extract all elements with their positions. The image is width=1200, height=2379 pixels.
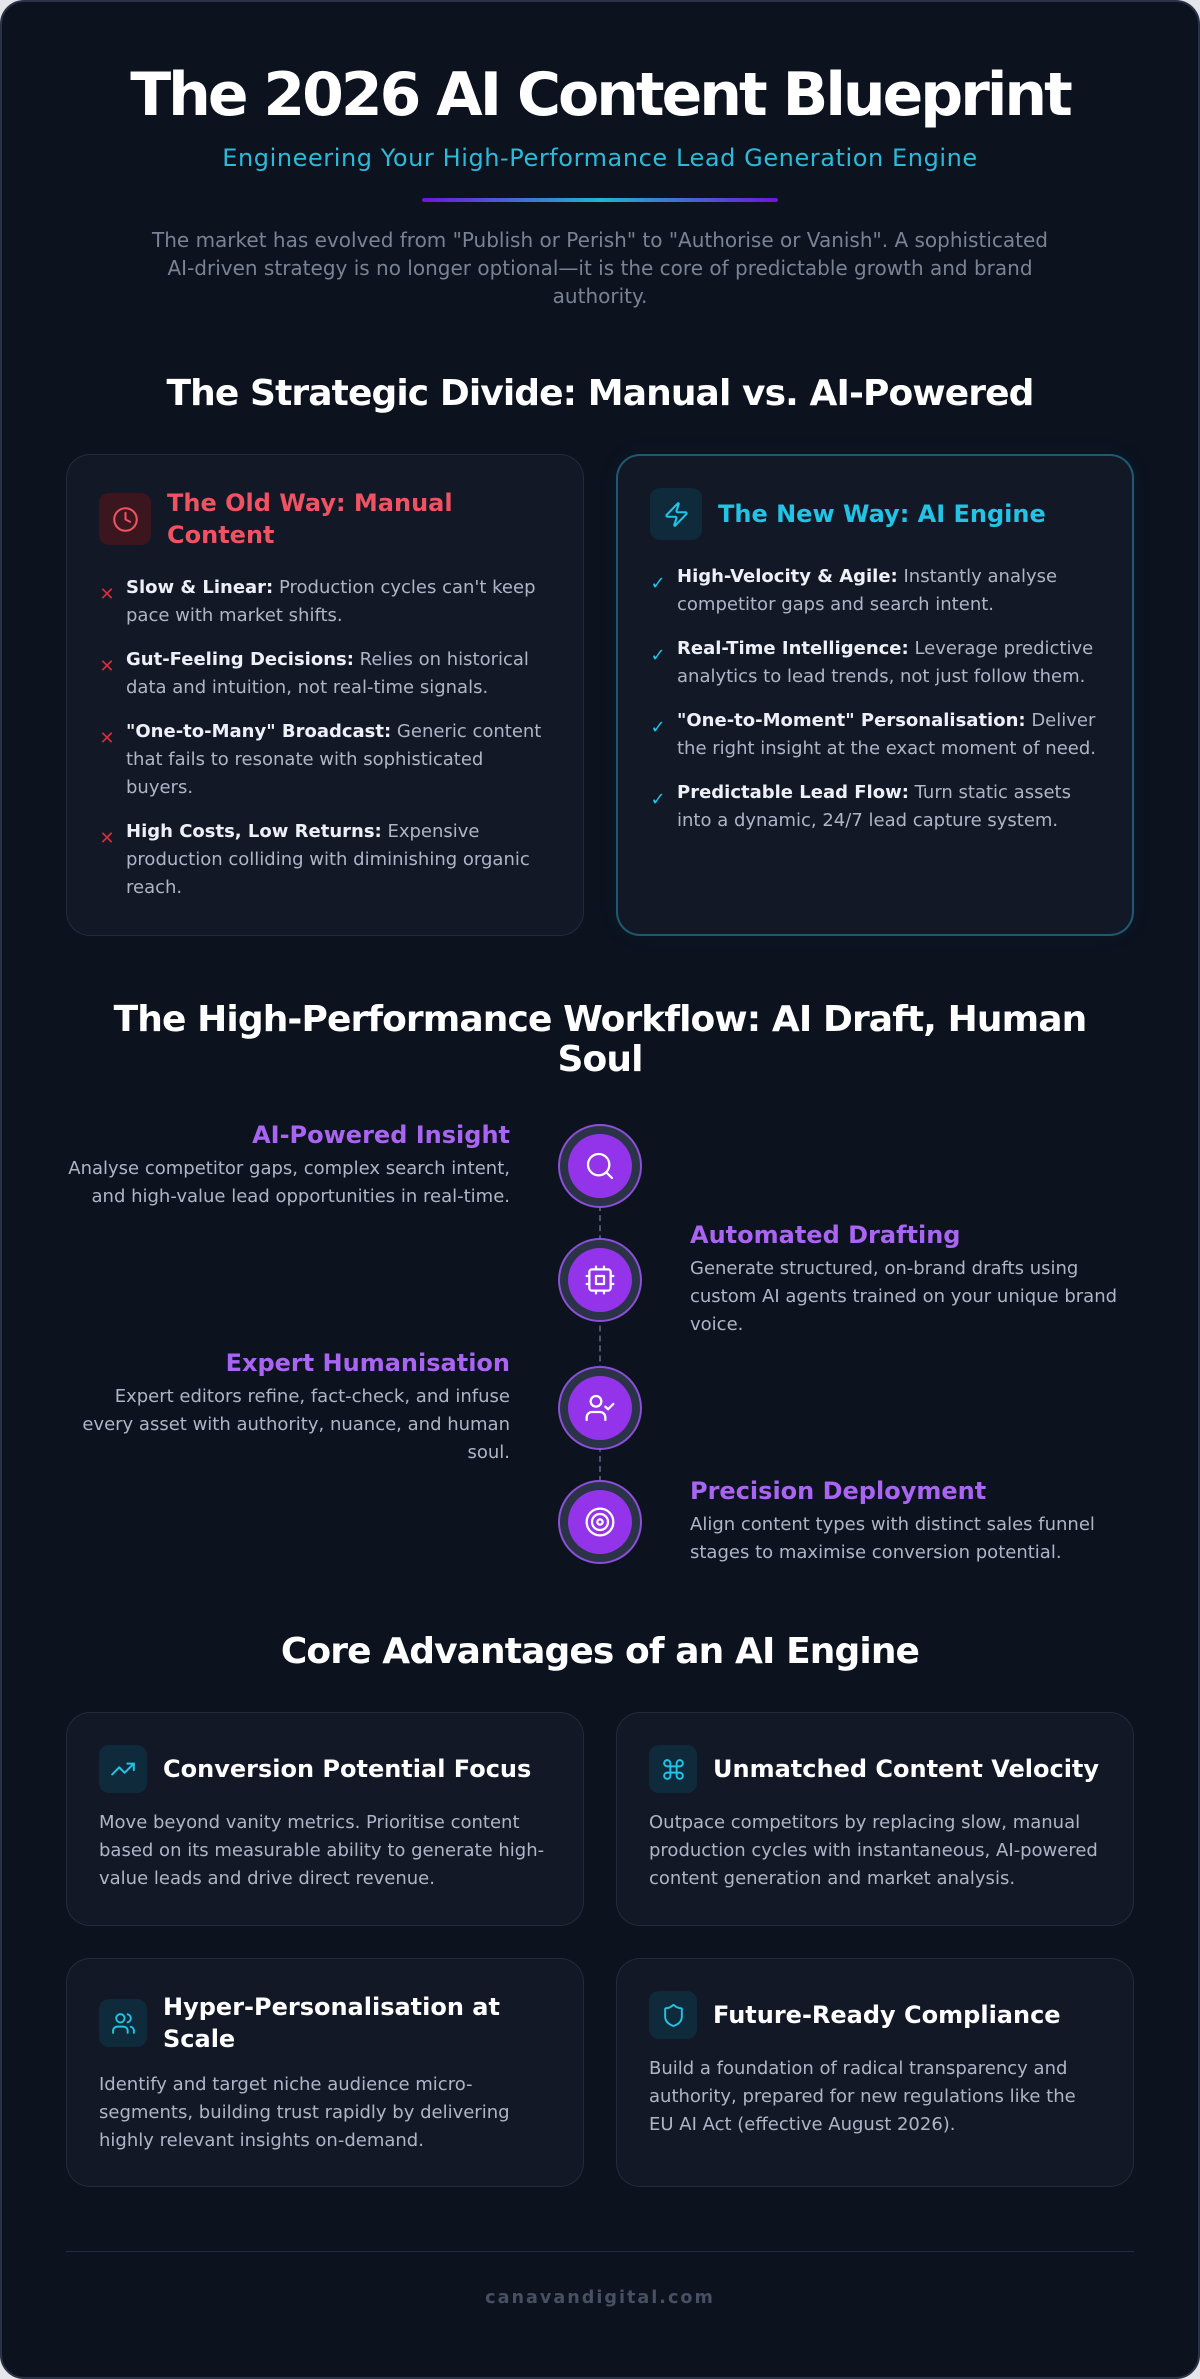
step text: AI-powered insight xyxy=(68,1121,510,1207)
card text: authority, prepared for new regulations like the xyxy=(649,2086,1076,2107)
card text: based on its measurable ability to generate high- xyxy=(99,1840,544,1861)
card text xyxy=(649,1812,1098,1889)
new way point 1: competitor gaps and search intent. xyxy=(677,594,994,615)
step text: precision deployment: Precision Deployment xyxy=(690,1477,986,1505)
marker: ✕ xyxy=(99,728,115,749)
card text xyxy=(99,2074,510,2151)
card heading: Unmatched Content Velocity xyxy=(713,1755,1099,1783)
panel: old way xyxy=(66,454,584,936)
intro text xyxy=(152,228,1048,308)
workflow timeline xyxy=(68,1121,1117,1564)
new way point 4 xyxy=(677,782,1071,831)
marker: ✓ xyxy=(650,789,666,810)
step text: automated drafting: Generate structured, on-brand drafts using xyxy=(690,1258,1078,1279)
old way point 4: production colliding with diminishing organic xyxy=(126,849,530,870)
card text: Identify and target niche audience micro- xyxy=(99,2074,473,2095)
card heading: Scale xyxy=(163,2025,235,2053)
step text: expert humanisation: Expert Humanisation xyxy=(226,1349,510,1377)
old way point 3 xyxy=(126,721,541,798)
card text: content generation and market analysis. xyxy=(649,1868,1015,1889)
panel: hyper-personalisation xyxy=(66,1958,584,2187)
step text: expert humanisation: soul. xyxy=(467,1442,510,1463)
gradient divider xyxy=(422,198,778,202)
marker: ✕ xyxy=(99,584,115,605)
icon: users xyxy=(99,1999,147,2047)
new way point 3: "One-to-Moment" Personalisation: Deliver xyxy=(677,710,1095,731)
old way point 1: Slow & Linear: Production cycles can't keep xyxy=(126,577,536,598)
marker: ✕ xyxy=(99,828,115,849)
old way point 2: data and intuition, not real-time signals. xyxy=(126,677,488,698)
card heading: Future-Ready Compliance xyxy=(713,2001,1061,2029)
card text: highly relevant insights on-demand. xyxy=(99,2130,424,2151)
marker: ✓ xyxy=(650,645,666,666)
card text xyxy=(99,1812,544,1889)
icon: command xyxy=(649,1745,697,1793)
panel: conversion potential focus xyxy=(66,1712,584,1926)
card text: Outpace competitors by replacing slow, manual xyxy=(649,1812,1080,1833)
panel: new way xyxy=(616,454,1134,936)
step text: automated drafting: custom AI agents trained on your unique brand xyxy=(690,1286,1117,1307)
old way point 4: High Costs, Low Returns: Expensive xyxy=(126,821,480,842)
old way point 3: that fails to resonate with sophisticated xyxy=(126,749,483,770)
step text: AI-powered insight: Analyse competitor gaps, complex search intent, xyxy=(68,1158,510,1179)
heading: workflow xyxy=(114,999,1086,1080)
card text: production cycles with instantaneous, AI-powered xyxy=(649,1840,1098,1861)
intro text: AI-driven strategy is no longer optional—it is the core of predictable growth and brand xyxy=(167,256,1033,280)
old way point 1: pace with market shifts. xyxy=(126,605,343,626)
panel: future-ready compliance xyxy=(616,1958,1134,2187)
marker: ✓ xyxy=(650,717,666,738)
step text: precision deployment xyxy=(690,1477,1095,1563)
panel: unmatched content velocity xyxy=(616,1712,1134,1926)
card text: EU AI Act (effective August 2026). xyxy=(649,2114,956,2135)
old way point 2 xyxy=(126,649,529,698)
old way heading xyxy=(167,489,453,549)
step text: automated drafting xyxy=(690,1221,1117,1335)
node icon: search xyxy=(558,1124,642,1208)
title: The 2026 AI Content Blueprint xyxy=(130,60,1070,130)
subtitle: Engineering Your High-Performance Lead Generation Engine xyxy=(222,144,978,172)
node icon: user check xyxy=(558,1366,642,1450)
icon: shield xyxy=(649,1991,697,2039)
icon: lightning xyxy=(650,488,702,540)
workflow timeline: voice. xyxy=(690,1314,743,1335)
intro text: The market has evolved from "Publish or Perish" to "Authorise or Vanish". A sophisticated xyxy=(152,228,1048,252)
old way point 3: "One-to-Many" Broadcast: Generic content xyxy=(126,721,541,742)
card text xyxy=(649,2058,1076,2135)
new way point 2 xyxy=(677,638,1093,687)
card heading: Conversion Potential Focus xyxy=(163,1755,531,1783)
new way point 2: Real-Time Intelligence: Leverage predictive xyxy=(677,638,1093,659)
heading: strategic divide: The Strategic Divide: Manual vs. AI-Powered xyxy=(167,373,1033,414)
card text: Move beyond vanity metrics. Prioritise content xyxy=(99,1812,520,1833)
new way point 3: the right insight at the exact moment of need. xyxy=(677,738,1096,759)
node icon: chip xyxy=(558,1238,642,1322)
new way heading: The New Way: AI Engine xyxy=(718,500,1046,528)
card text: value leads and drive direct revenue. xyxy=(99,1868,435,1889)
icon: trending up xyxy=(99,1745,147,1793)
step text: AI-powered insight: and high-value lead opportunities in real-time. xyxy=(92,1186,510,1207)
old way point 2: Gut-Feeling Decisions: Relies on historical xyxy=(126,649,529,670)
step text: AI-powered insight: AI-Powered Insight xyxy=(252,1121,510,1149)
node icon: target xyxy=(558,1480,642,1564)
old way point 4: reach. xyxy=(126,877,182,898)
heading: workflow: Soul xyxy=(557,1039,643,1080)
card heading xyxy=(163,1993,500,2053)
new way point 2: analytics to lead trends, not just follow them. xyxy=(677,666,1085,687)
step text: expert humanisation: every asset with authority, nuance, and human xyxy=(82,1414,510,1435)
new way point 3 xyxy=(677,710,1096,759)
step text: expert humanisation xyxy=(82,1349,510,1463)
icon: clock xyxy=(99,493,151,545)
old way point 1 xyxy=(126,577,536,626)
footer: canavandigital.com xyxy=(485,2288,715,2308)
new way point 1: High-Velocity & Agile: Instantly analyse xyxy=(677,566,1057,587)
intro text: authority. xyxy=(553,284,647,308)
new way point 1 xyxy=(677,566,1057,615)
marker: ✓ xyxy=(650,573,666,594)
step text: automated drafting: Automated Drafting xyxy=(690,1221,960,1249)
old way point 3: buyers. xyxy=(126,777,193,798)
connector line xyxy=(599,1165,601,1522)
heading: core advantages: Core Advantages of an AI Engine xyxy=(281,1631,919,1672)
old way point 4 xyxy=(126,821,530,898)
old way heading: The Old Way: Manual xyxy=(167,489,453,517)
card text: Build a foundation of radical transparency and xyxy=(649,2058,1067,2079)
step text: precision deployment: stages to maximise conversion potential. xyxy=(690,1542,1062,1563)
step text: expert humanisation: Expert editors refine, fact-check, and infuse xyxy=(115,1386,510,1407)
marker: ✕ xyxy=(99,656,115,677)
heading: workflow: The High-Performance Workflow: AI Draft, Human xyxy=(114,999,1086,1040)
old way heading: Content xyxy=(167,521,274,549)
new way point 4: Predictable Lead Flow: Turn static assets xyxy=(677,782,1071,803)
card text: segments, building trust rapidly by delivering xyxy=(99,2102,510,2123)
card heading: Hyper-Personalisation at xyxy=(163,1993,500,2021)
new way point 4: into a dynamic, 24/7 lead capture system. xyxy=(677,810,1058,831)
step text: precision deployment: Align content types with distinct sales funnel xyxy=(690,1514,1095,1535)
